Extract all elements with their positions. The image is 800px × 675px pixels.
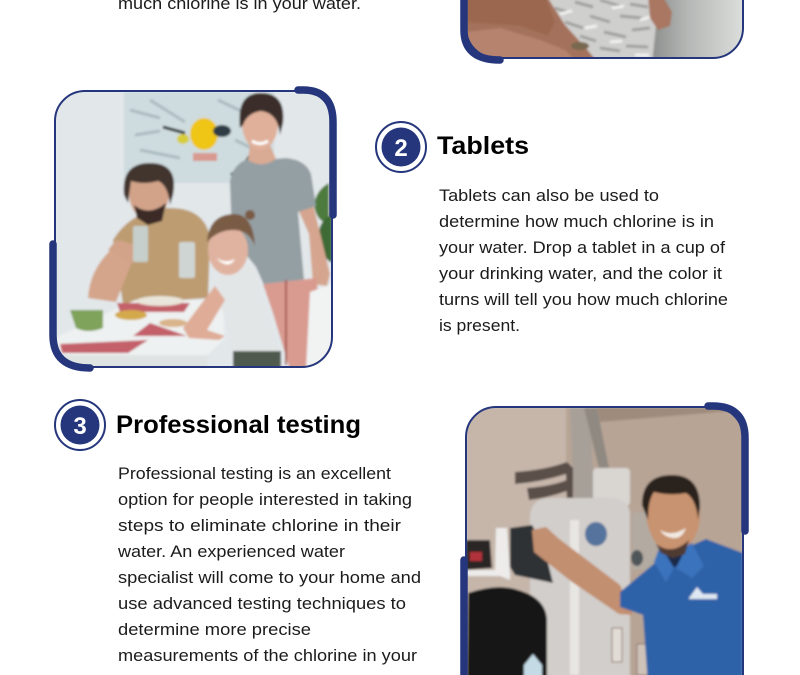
photo: family at table with water bbox=[55, 90, 333, 373]
technician shirt bbox=[620, 539, 743, 675]
grey wall panel bbox=[632, 512, 658, 570]
text block: tablets description: your water. Drop a tablet in a cup of bbox=[439, 239, 725, 257]
frame: photo outline bbox=[466, 0, 743, 58]
frame: photo outline bbox=[55, 91, 332, 367]
text block: professional testing description bbox=[117, 465, 421, 665]
accent: lower-left corner bracket bbox=[464, 0, 500, 60]
badge: number 2 bbox=[376, 122, 426, 172]
table bbox=[57, 298, 224, 354]
pipes bbox=[570, 408, 594, 498]
accent: top-right corner bracket bbox=[708, 406, 745, 531]
text block: professional testing description: specialist will come to your home and bbox=[118, 569, 421, 587]
accent: top-right corner bracket bbox=[298, 90, 333, 215]
chair bbox=[306, 284, 332, 369]
text block: tablets description: Tablets can also be used to bbox=[439, 187, 659, 205]
text block: professional testing description: measurements of the chlorine in your bbox=[118, 647, 418, 665]
heading: Professional testing: Professional testing bbox=[116, 411, 361, 439]
photo: hand holding chlorine powder bbox=[464, 0, 743, 65]
text block: professional testing description: water. An experienced water bbox=[117, 543, 346, 561]
text block: tablets description: turns will tell you how much chlorine bbox=[439, 291, 728, 309]
frame: photo outline bbox=[466, 407, 743, 675]
heading: Tablets: Tablets bbox=[437, 132, 529, 160]
text block: tablets description: determine how much chlorine is in bbox=[439, 213, 714, 231]
girl bbox=[212, 265, 280, 356]
text block: tablets description: your drinking water, and the color it bbox=[439, 265, 722, 283]
badge: number 2: 2 bbox=[394, 135, 408, 162]
photo: technician beside water heater bbox=[464, 406, 745, 675]
badge: number 3 bbox=[55, 400, 105, 450]
plant bbox=[314, 183, 329, 223]
accent: left edge bracket bbox=[460, 560, 468, 675]
accent: lower-left corner bracket bbox=[53, 244, 90, 368]
text block: professional testing description: option for people interested in taking bbox=[118, 491, 412, 509]
text block: tablets description: is present. bbox=[439, 317, 520, 335]
logo on tank bbox=[524, 654, 542, 675]
water heater bbox=[530, 498, 630, 675]
text block: professional testing description: Professional testing is an excellent bbox=[118, 465, 391, 483]
man bbox=[113, 208, 210, 304]
woman bbox=[229, 155, 250, 176]
text block: tablets description bbox=[439, 187, 728, 335]
text block: professional testing description: determine more precise bbox=[118, 621, 311, 639]
text block: professional testing description: use advanced testing techniques to bbox=[118, 595, 406, 613]
softener tank bbox=[467, 587, 547, 675]
technician arm bbox=[532, 527, 633, 615]
technician head bbox=[646, 490, 700, 551]
badge: number 3: 3 bbox=[73, 413, 87, 440]
text block: professional testing description: steps to eliminate chlorine in their bbox=[118, 517, 402, 535]
